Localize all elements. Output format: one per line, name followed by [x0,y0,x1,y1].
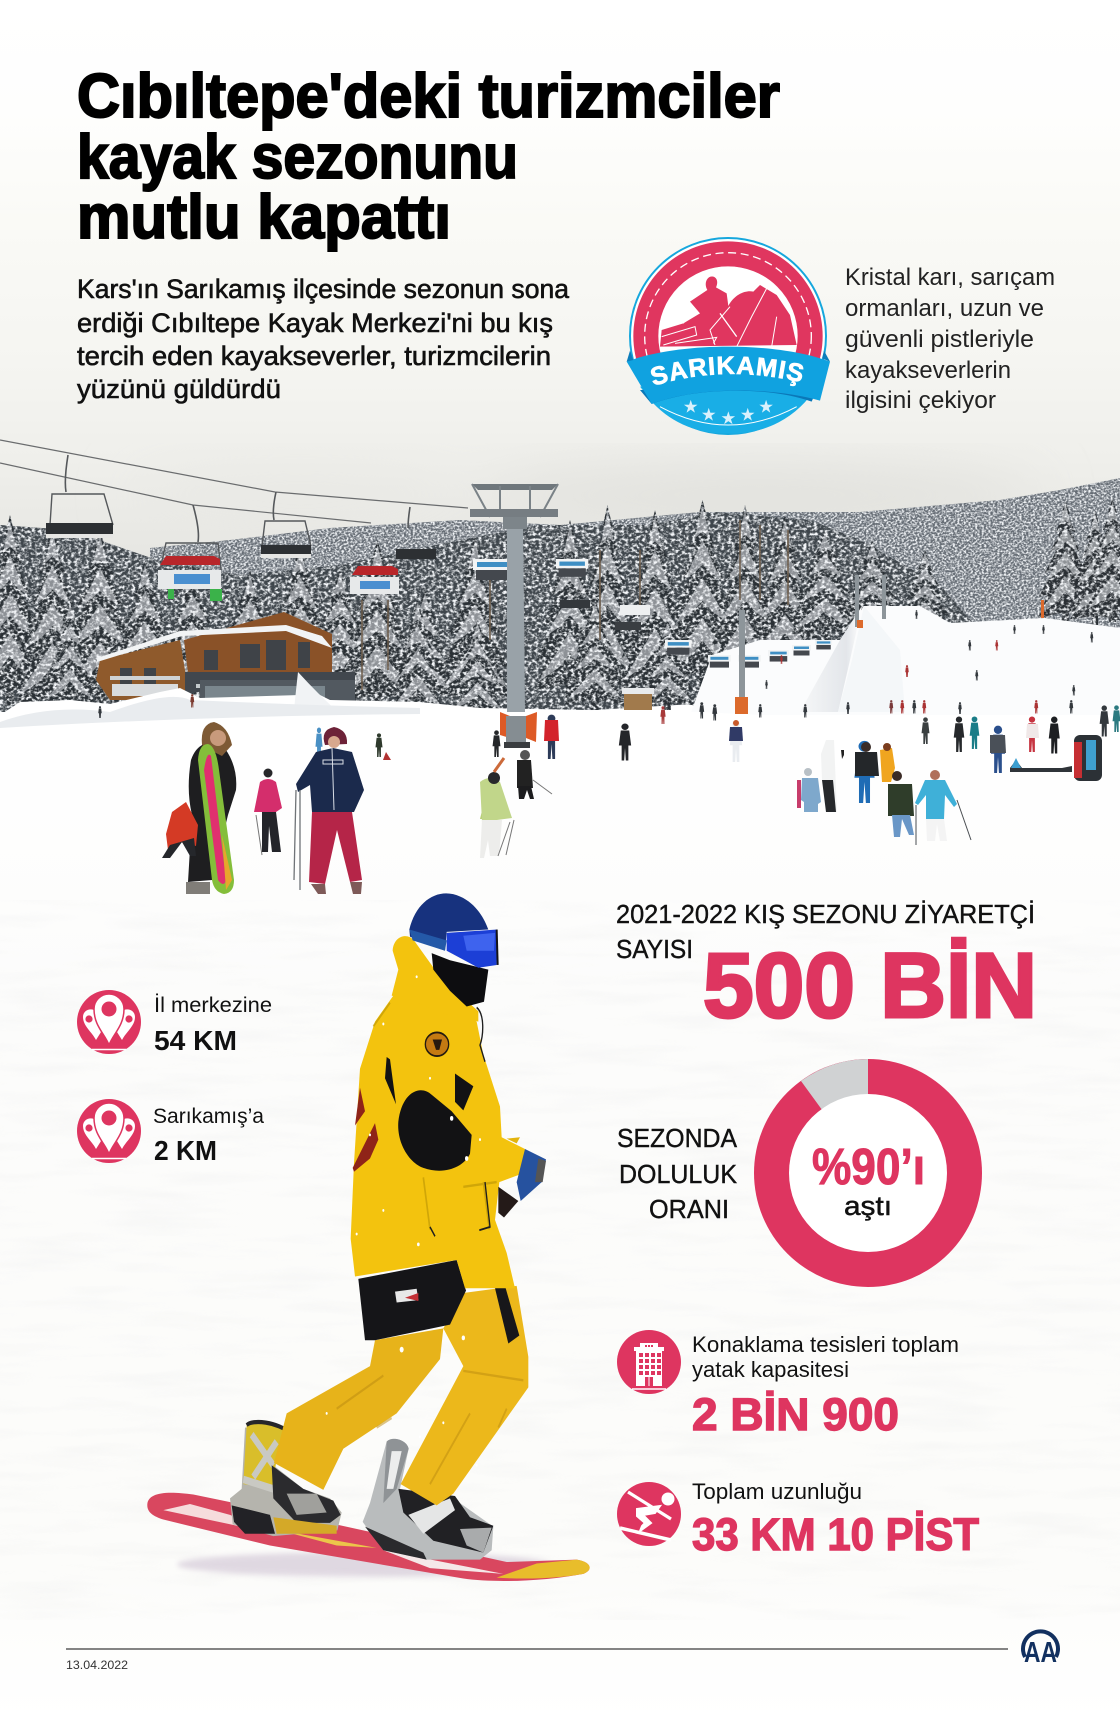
face mask [432,953,488,1006]
badge rim [630,238,826,434]
photo: main lift pylon [470,484,558,748]
icon: skier [617,1482,681,1546]
stars: ★ [683,397,698,417]
rear binding and boot [230,1422,342,1536]
jacket shadows [373,1003,497,1229]
distance: Sarıkamış'a [153,1105,264,1166]
jacket body [351,996,525,1288]
footer date: 13.04.2022 [66,1658,128,1672]
donut chart: occupancy [754,1059,982,1287]
hotel capacity: yatak kapasitesi [692,1357,849,1382]
icon: AA logo [1023,1631,1058,1669]
photo: distant forested hills [150,478,1120,650]
footer rule [66,1648,1008,1650]
photo: child in red [162,802,198,858]
badge description: Kristal karı, sarıçam [845,264,1055,291]
photo: mid-distance skiers [315,715,1102,781]
occupancy label: SEZONDA [617,1123,738,1153]
photo: snowy forest [0,500,975,720]
gloves [498,1137,546,1217]
photo: skier in lime jacket [480,772,514,858]
clouds [130,469,1040,521]
visitor count: SAYISI [616,934,693,964]
ribbon [627,347,830,404]
badge: Sarıkamış logo: SARIKAMIŞ [650,356,804,386]
goggles [447,930,498,968]
title [77,62,780,252]
badge description [845,264,1055,414]
black trouser strap [495,1286,519,1344]
photo: skier in black [494,750,552,799]
photo: ski slope [690,606,1120,720]
icon: location pin (Sarıkamış'a) [77,1099,141,1163]
title: kayak sezonunu [77,123,518,192]
donut chart: occupancy: %90’ı [812,1138,925,1195]
visitor count: 2021-2022 KIŞ SEZONU ZİYARETÇİ [616,899,1035,929]
back patches [353,1088,378,1172]
intro paragraph: yüzünü güldürdü [77,374,281,404]
beanie [409,893,488,951]
distance: İl merkezine: İl merkezine [154,994,272,1017]
title: Cıbıltepe'deki turizmciler [77,62,780,131]
front leg of trousers [401,1286,528,1505]
falling snow flecks [326,975,481,1467]
donut chart: occupancy: aştı [844,1191,892,1221]
badge description: kayakseverlerin [845,357,1011,384]
snow shadow under board [177,1552,550,1577]
occupancy label: DOLULUK [619,1159,738,1189]
badge red disc [633,241,823,431]
stars: ★ [758,397,774,417]
icon: AA logo: AA [1024,1637,1057,1669]
stitched ring [645,253,811,419]
elbow patch [398,1090,472,1171]
shoulder badge [425,1032,449,1056]
front binding and boot [363,1439,493,1560]
photo: snow mounds and field edge [0,672,1120,770]
slope length [692,1479,979,1560]
photo: right-edge spruce trees [1038,498,1120,626]
distance: Sarıkamış'a: Sarıkamış’a [153,1105,264,1128]
stars: ★ [740,405,755,425]
skier and mountain [660,276,797,347]
badge description: ilgisini çekiyor [845,387,996,414]
visitor count [616,899,1037,1037]
zipper cord [430,1007,490,1236]
distance: İl merkezine [154,994,272,1056]
trouser folds [337,1371,523,1484]
jacket hem: black shorts [358,1260,466,1340]
distance: Sarıkamış'a: 2 KM [154,1135,217,1166]
badge description: güvenli pistleriyle [845,326,1034,353]
shoulder strip [385,1057,473,1110]
intro paragraph [77,274,569,404]
hotel capacity: Konaklama tesisleri toplam [692,1332,959,1357]
snowboard [147,1493,590,1581]
texture: faint ski tracks on lower snow [0,900,1120,1620]
photo: distant lift pylons [622,575,1044,714]
photo: woman in navy and crimson [294,727,364,894]
rear leg of trousers [274,1328,443,1490]
slope length: 33 KM 10 PİST [692,1509,979,1560]
icon: hotel [617,1330,681,1394]
photo: foreground woman with snowboard [186,722,236,894]
stars: ★ [721,408,736,428]
title: mutlu kapattı [77,183,451,252]
occupancy label [617,1123,738,1224]
photo: girl in pink [254,768,282,855]
badge: Sarıkamış logo [626,237,830,435]
icon: location pin (İl merkezine) [77,990,141,1054]
snowboarder [147,893,590,1581]
lower blue segment [640,387,817,433]
photo: tree trunks [362,520,788,690]
photo: chairlift cables [0,440,468,523]
occupancy label: ORANI [649,1194,729,1224]
jacket hood [392,936,478,1022]
intro paragraph: Kars'ın Sarıkamış ilçesinde sezonun sona [77,274,569,304]
stars [683,397,774,428]
visitor count: 500 BİN [703,935,1037,1037]
distance: İl merkezine: 54 KM [154,1025,237,1056]
hotel capacity [692,1332,959,1440]
photo: distant skiers [98,610,1120,736]
intro paragraph: erdiği Cıbıltepe Kayak Merkezi'ni bu kış [77,308,553,338]
badge description: ormanları, uzun ve [845,295,1044,322]
hotel capacity: 2 BİN 900 [692,1389,899,1440]
stars: ★ [701,405,716,425]
slope length: Toplam uzunluğu [692,1479,862,1504]
background: hazy sky [0,0,1120,560]
photo: wooden lodge [96,612,355,710]
photo: chairlift chairs [46,455,832,668]
inner scene circle [659,267,797,405]
ribbon text [653,374,810,386]
background: snow field [0,700,1120,1721]
intro paragraph: tercih eden kayakseverler, turizmcilerin [77,341,551,371]
photo: right group of skiers [797,740,971,845]
